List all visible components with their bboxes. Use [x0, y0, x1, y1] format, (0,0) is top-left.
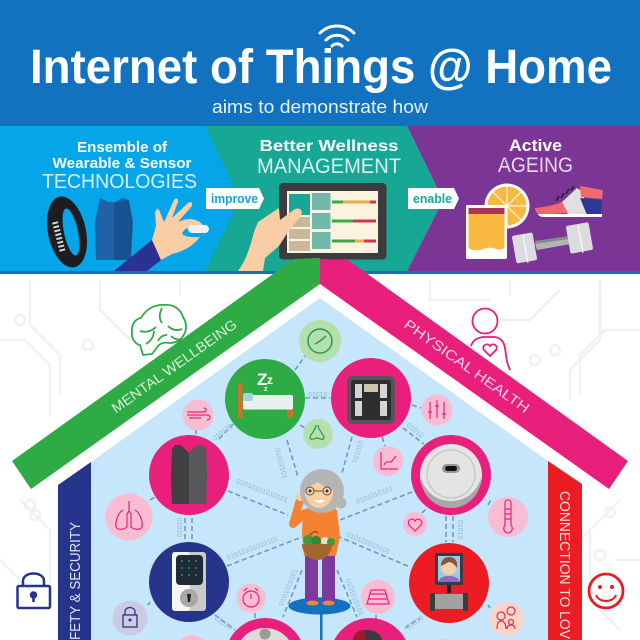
binary labels: 0101010101 — [355, 485, 394, 506]
label: enable — [408, 188, 459, 209]
header band — [0, 0, 640, 127]
small icon: nose — [303, 419, 333, 449]
device: smart vest — [149, 435, 229, 515]
binary labels: 01010101010101 — [235, 478, 289, 504]
icon: brain — [132, 305, 186, 355]
label: enable: enable — [413, 192, 452, 206]
wall: safety & security — [58, 462, 91, 640]
binary labels: 01010101 — [273, 448, 288, 480]
device: smart bed: z — [264, 386, 268, 393]
icon: person with heart — [471, 308, 510, 370]
figure: elderly woman with basket — [293, 469, 346, 606]
binary labels — [177, 392, 463, 632]
small icon: clock — [299, 320, 341, 362]
small icon: heart — [403, 512, 427, 536]
device: wearable shoe — [334, 618, 406, 640]
roof: mental wellbeing: MENTAL WELLBEING — [108, 316, 240, 416]
heading: ensemble of technologies — [42, 139, 197, 193]
binary labels: 01010 — [308, 392, 328, 399]
device: smoke detector — [229, 618, 301, 640]
binary labels: 010101 — [212, 423, 235, 443]
icon: tablet dashboard — [279, 183, 386, 260]
heading: active ageing — [498, 136, 573, 177]
heading: active ageing: AGEING — [498, 154, 573, 177]
panel: technologies — [0, 126, 260, 271]
binary labels: 01010 — [405, 615, 425, 632]
heading: ensemble of technologies: Ensemble of — [77, 139, 168, 156]
small icon: thermometer — [488, 497, 528, 537]
title: Internet of Things @ Home — [30, 41, 612, 94]
heading: better wellness management: MANAGEMENT — [257, 155, 401, 178]
connector lines — [148, 356, 492, 630]
binary labels: 0101010101 — [278, 568, 299, 607]
platform and stand — [288, 598, 350, 640]
device: robot vacuum — [411, 435, 491, 515]
heading: ensemble of technologies: Wearable & Sensor — [52, 155, 192, 172]
binary labels: 0101010101 — [343, 578, 364, 617]
device: smart bed: z — [267, 373, 273, 387]
wall: safety & security: FETY & SECURITY — [68, 522, 84, 640]
small icon: stopwatch — [236, 584, 266, 612]
small icon: stairs — [361, 580, 395, 614]
hand on tablet — [238, 208, 302, 271]
icon: hand holding sensor — [114, 198, 209, 271]
binary labels: 010101 — [350, 439, 364, 464]
small icon: lungs — [106, 494, 152, 540]
small icon: wind — [182, 400, 214, 430]
device: smart door lock — [149, 542, 229, 622]
icon: wifi signal — [320, 26, 354, 46]
device: smart bed — [225, 359, 305, 439]
icon: juice glass with orange — [466, 184, 530, 259]
device: telepresence robot — [409, 543, 489, 623]
wall: connection to loved ones — [548, 461, 582, 640]
small bottom circle left — [180, 635, 204, 640]
small icon: chart — [373, 446, 403, 476]
device: smart scale — [331, 358, 411, 438]
binary labels: 01010 — [213, 615, 233, 632]
icon: dumbbell — [512, 222, 593, 264]
label: improve — [206, 188, 264, 209]
heading: better wellness management: Better Wellness — [260, 138, 399, 155]
device: smart bed: Z — [257, 370, 267, 389]
small icon: padlock — [112, 600, 148, 636]
subtitle: aims to demonstrate how — [212, 97, 429, 117]
icon: fitness band — [41, 193, 93, 271]
house interior — [91, 298, 548, 640]
icon: padlock outline — [18, 574, 50, 608]
heading: ensemble of technologies: TECHNOLOGIES — [42, 170, 197, 193]
small icon: family — [490, 602, 524, 636]
heading: active ageing: Active — [509, 136, 562, 155]
small bottom circle right — [441, 638, 453, 640]
roof: mental wellbeing — [12, 258, 320, 489]
roof: physical health: PHYSICAL HEALTH — [401, 316, 533, 416]
binary labels: 01010 — [405, 422, 425, 440]
binary labels: 010101010101 — [345, 531, 391, 556]
heading: better wellness management — [257, 138, 401, 178]
binary labels: 01010 — [177, 517, 184, 537]
small icon: sliders — [422, 394, 452, 426]
icon: smiley — [589, 574, 623, 608]
panel: active ageing — [407, 126, 640, 271]
binary labels: 01010101010101 — [226, 536, 280, 562]
roof: physical health — [320, 259, 628, 489]
icon: sneaker — [535, 186, 603, 217]
label: improve: improve — [211, 192, 258, 206]
binary labels: 01010 — [456, 520, 463, 540]
icon: smart vest — [95, 198, 133, 260]
panel: wellness management — [205, 126, 443, 271]
